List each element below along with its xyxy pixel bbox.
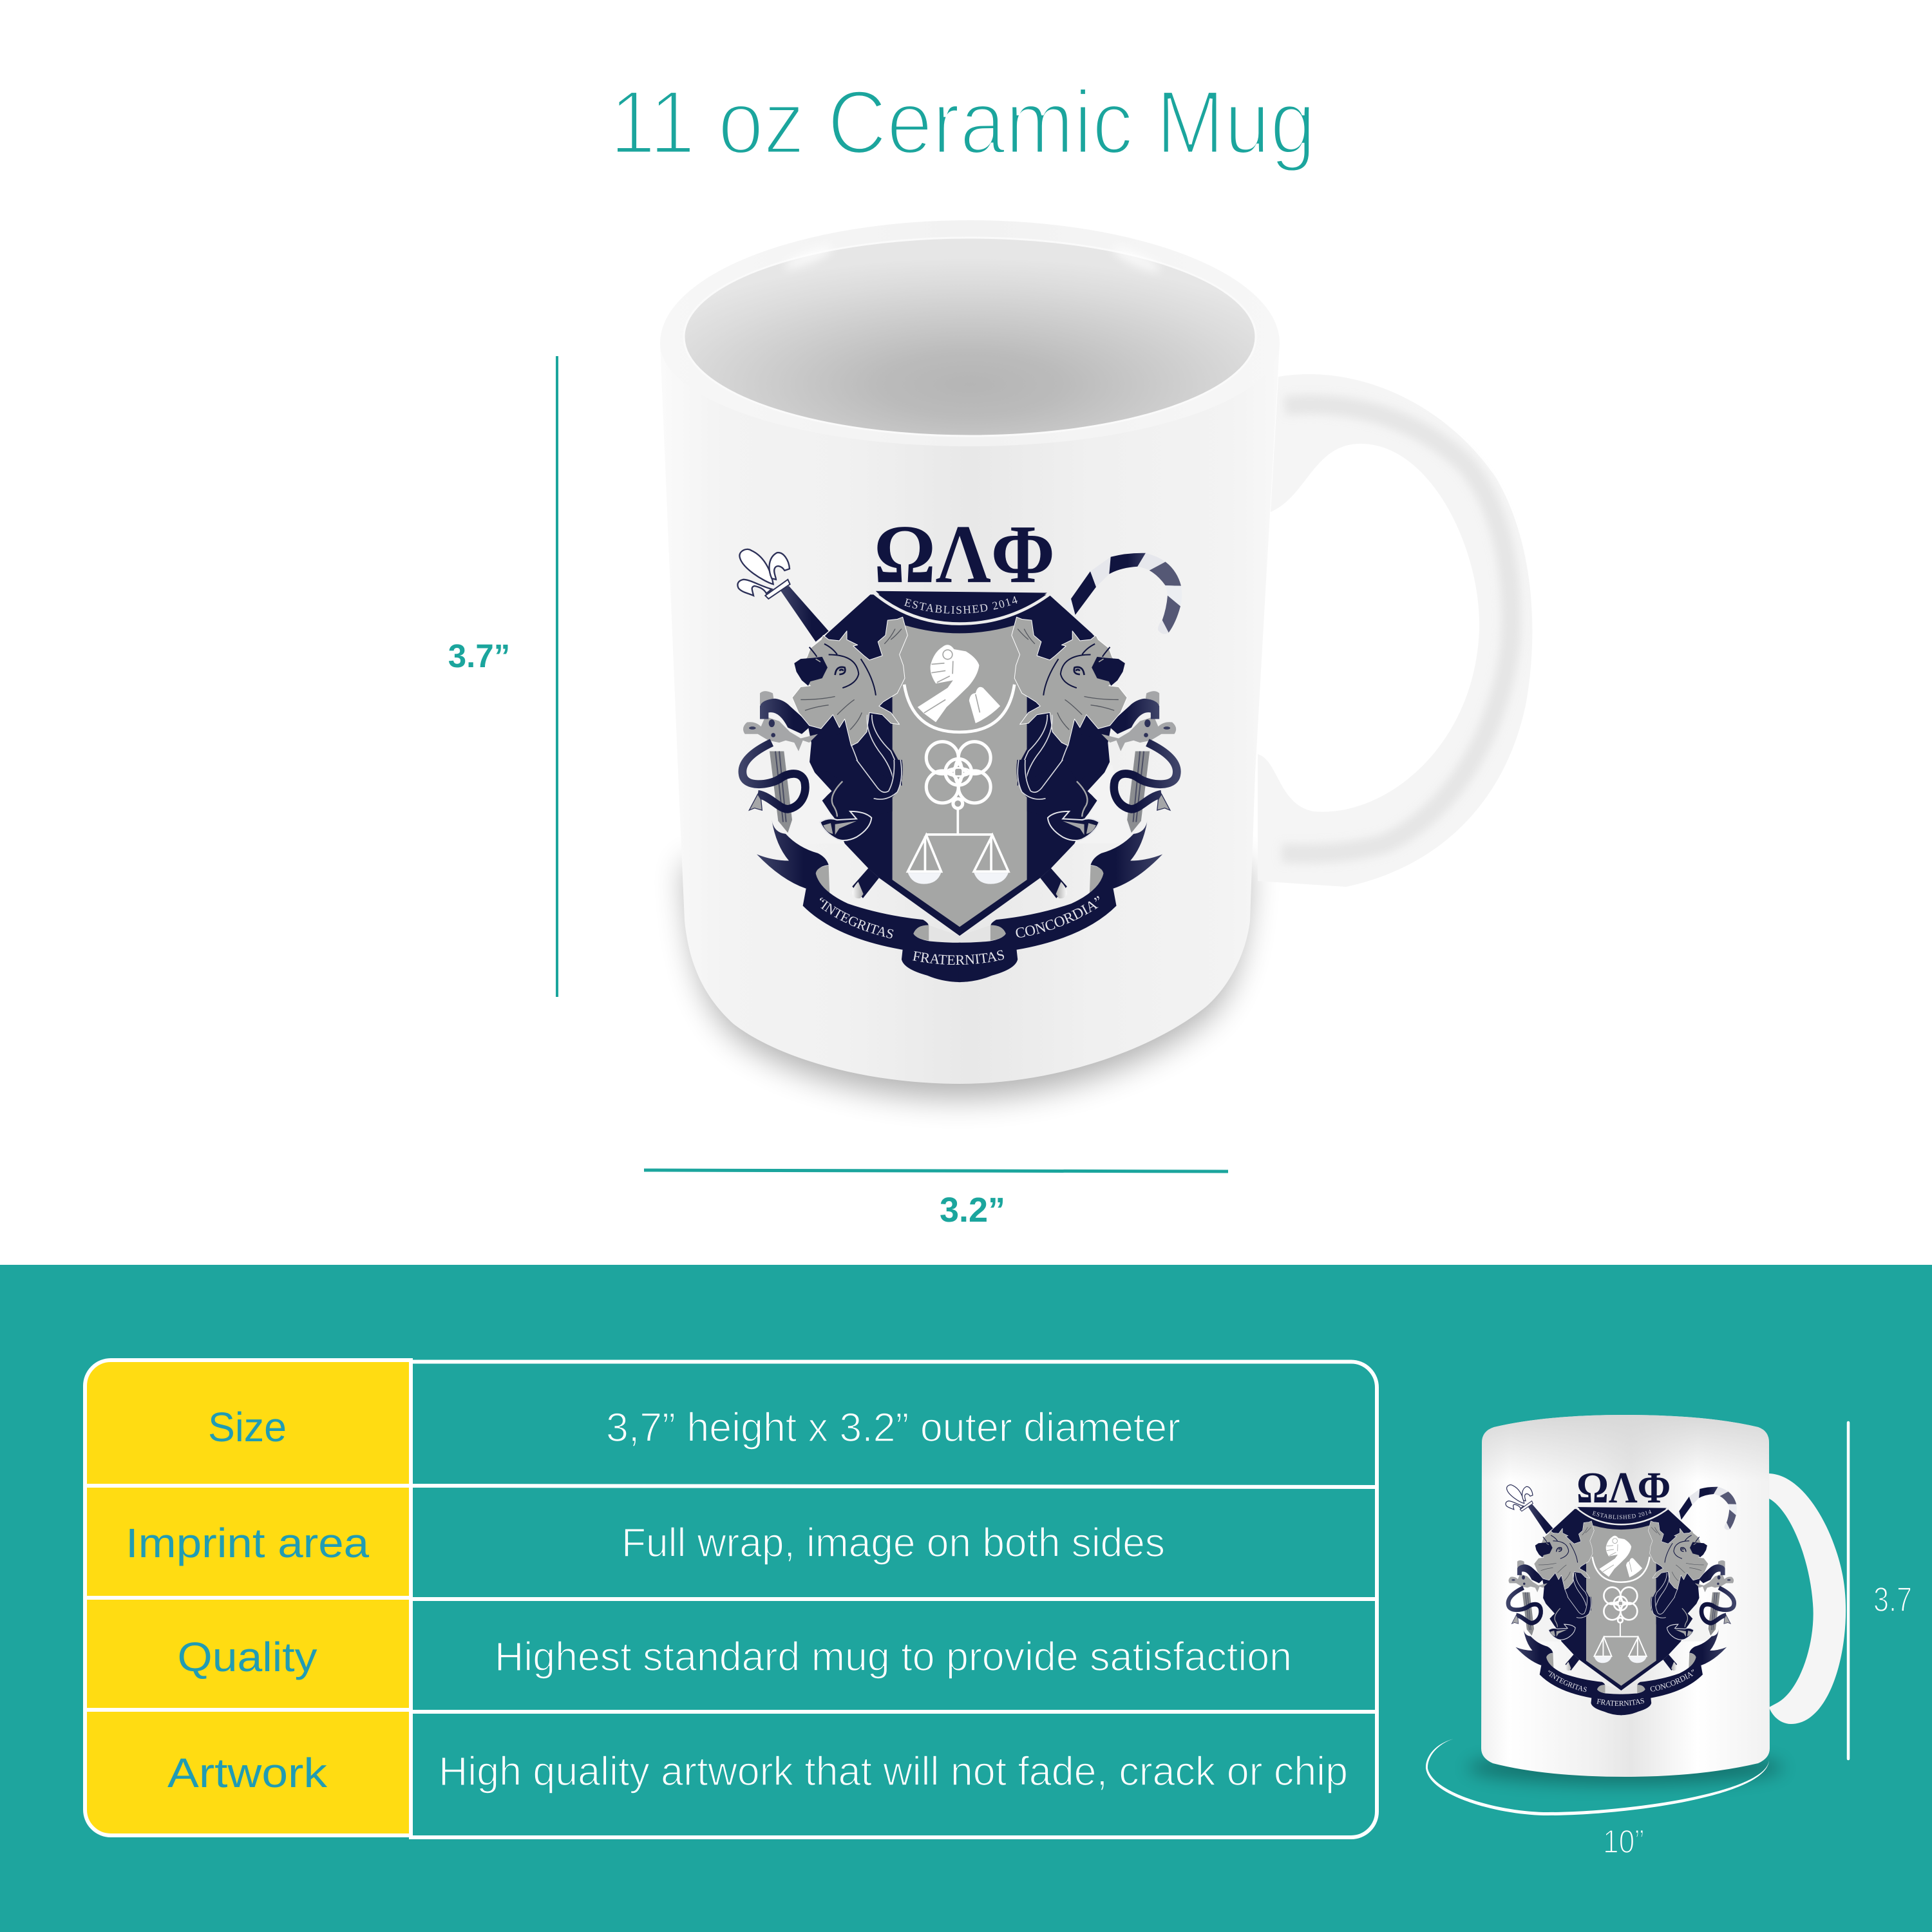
width dimension line	[644, 1170, 1228, 1171]
crest on main mug: “INTEGRITAS	[820, 898, 894, 938]
row: artwork value: High quality artwork that will not fade, crack or chip	[439, 1749, 1348, 1794]
circumference arc	[1426, 1739, 1769, 1815]
spec table	[85, 1360, 1377, 1837]
crest on small mug: FRATERNITAS	[1596, 1698, 1644, 1706]
crest on small mug: “INTEGRITAS	[1548, 1671, 1587, 1692]
row: quality value: Highest standard mug to provide satisfaction	[495, 1634, 1292, 1680]
main mug photo	[660, 220, 1532, 1098]
crest on main mug	[737, 509, 1181, 983]
crest on small mug: CONCORDIA”	[1650, 1669, 1694, 1691]
crest on main mug: CONCORDIA”	[1016, 896, 1099, 938]
circumference label: 10”	[1603, 1823, 1644, 1860]
row: quality label: Quality	[178, 1634, 317, 1680]
teal panel	[0, 1265, 1932, 1932]
crest on small mug	[1505, 1463, 1737, 1716]
height dimension line	[556, 356, 558, 997]
value column	[411, 1361, 1377, 1837]
row: artwork label: Artwork	[167, 1750, 328, 1796]
crest on main mug: ESTABLISHED 2014	[904, 596, 1018, 614]
crest on small mug: ΩΛΦ	[1577, 1463, 1671, 1512]
row: imprint value: Full wrap, image on both sides	[621, 1520, 1165, 1566]
title: 11 oz Ceramic Mug	[610, 71, 1316, 173]
crest on small mug: ESTABLISHED 2014	[1592, 1510, 1651, 1519]
row: imprint area label: Imprint area	[126, 1520, 369, 1566]
row: size value: 3,7” height x 3.2” outer diameter	[606, 1405, 1180, 1450]
height label: 3.7”	[448, 638, 510, 674]
row: size label: Size	[208, 1404, 287, 1450]
width label: 3.2”	[940, 1191, 1005, 1229]
crest on main mug: FRATERNITAS	[912, 951, 1004, 965]
crest on main mug: ΩΛΦ	[874, 509, 1055, 601]
small mug height line	[1847, 1423, 1850, 1759]
label column	[85, 1360, 411, 1835]
small mug height label: 3.7	[1873, 1580, 1912, 1619]
small mug photo	[1468, 1415, 1846, 1785]
